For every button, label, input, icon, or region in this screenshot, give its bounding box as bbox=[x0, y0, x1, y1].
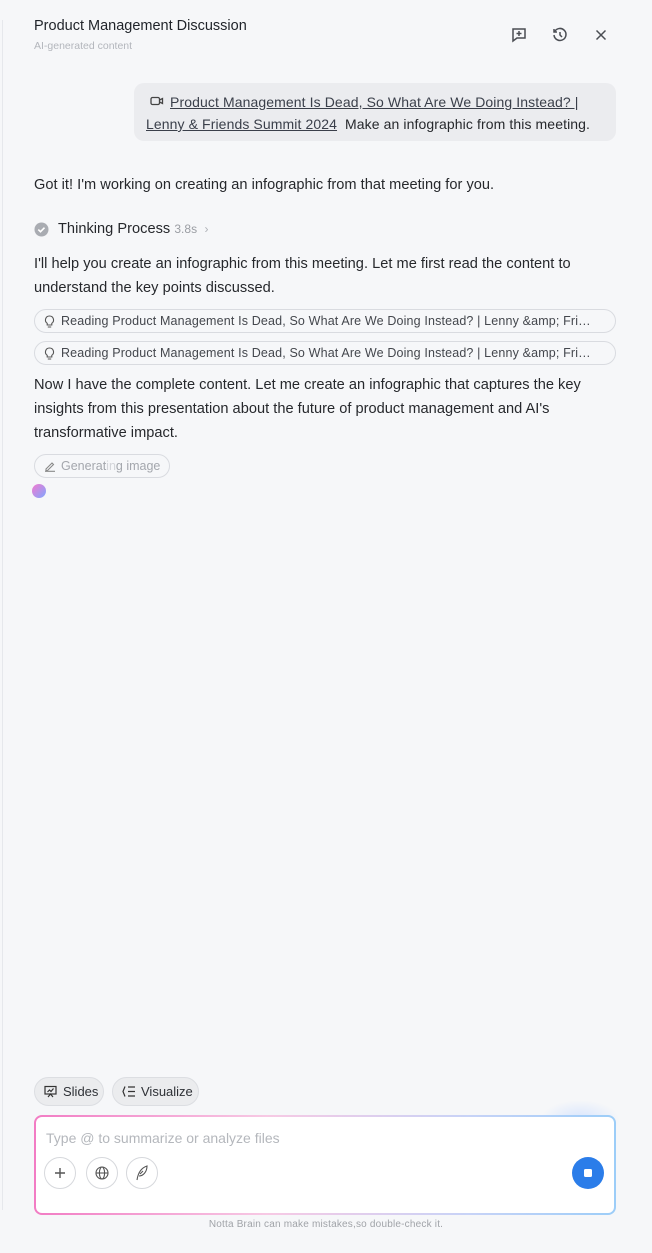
explanation text: I'll help you create an infographic from this meeting. Let me first read the content to bbox=[34, 256, 571, 272]
slides button bbox=[34, 1077, 104, 1106]
explanation text bbox=[34, 256, 571, 296]
generating image chip bbox=[34, 454, 170, 478]
thinking process row: Thinking Process 3.8s › bbox=[58, 221, 209, 237]
placeholder: Type @ to summarize or analyze files bbox=[46, 1130, 280, 1146]
complete content text bbox=[34, 377, 581, 441]
header icons bbox=[512, 28, 606, 42]
generating image chip: Generating image bbox=[61, 459, 160, 473]
stop button bbox=[572, 1157, 604, 1189]
user message bubble bbox=[134, 83, 616, 141]
complete content text: Now I have the complete content. Let me create an infographic that captures the key bbox=[34, 377, 581, 393]
icon: globe bbox=[86, 1157, 118, 1189]
visualize button bbox=[112, 1077, 199, 1106]
icon: history bbox=[553, 28, 567, 42]
reading chip 2 bbox=[34, 341, 616, 365]
assistant reply text: Got it! I'm working on creating an infographic from that meeting for you. bbox=[34, 177, 494, 193]
user message bubble: Lenny & Friends Summit 2024 Make an infographic from this meeting. bbox=[146, 116, 590, 132]
icon: new chat bbox=[512, 28, 526, 42]
left edge line bbox=[2, 20, 3, 1210]
slides button: Slides bbox=[63, 1084, 98, 1099]
user message bubble: Product Management Is Dead, So What Are We Doing Instead? | bbox=[170, 94, 578, 110]
icon: feather bbox=[126, 1157, 158, 1189]
reading chip 1 bbox=[34, 309, 616, 333]
loading dot bbox=[32, 484, 46, 498]
complete content text: transformative impact. bbox=[34, 425, 178, 441]
header subtitle: AI-generated content bbox=[34, 40, 132, 52]
icon: close bbox=[596, 30, 606, 40]
explanation text: understand the key points discussed. bbox=[34, 280, 275, 296]
icon: plus bbox=[44, 1157, 76, 1189]
complete content text: insights from this presentation about the future of product management and AI's bbox=[34, 401, 549, 417]
disclaimer: Notta Brain can make mistakes,so double-check it. bbox=[209, 1219, 443, 1230]
input glow bbox=[540, 1100, 620, 1140]
input box bbox=[34, 1115, 616, 1215]
header title: Product Management Discussion bbox=[34, 18, 247, 34]
icon: check bbox=[34, 222, 48, 236]
icon: video bbox=[150, 96, 164, 106]
visualize button: Visualize bbox=[141, 1084, 193, 1099]
